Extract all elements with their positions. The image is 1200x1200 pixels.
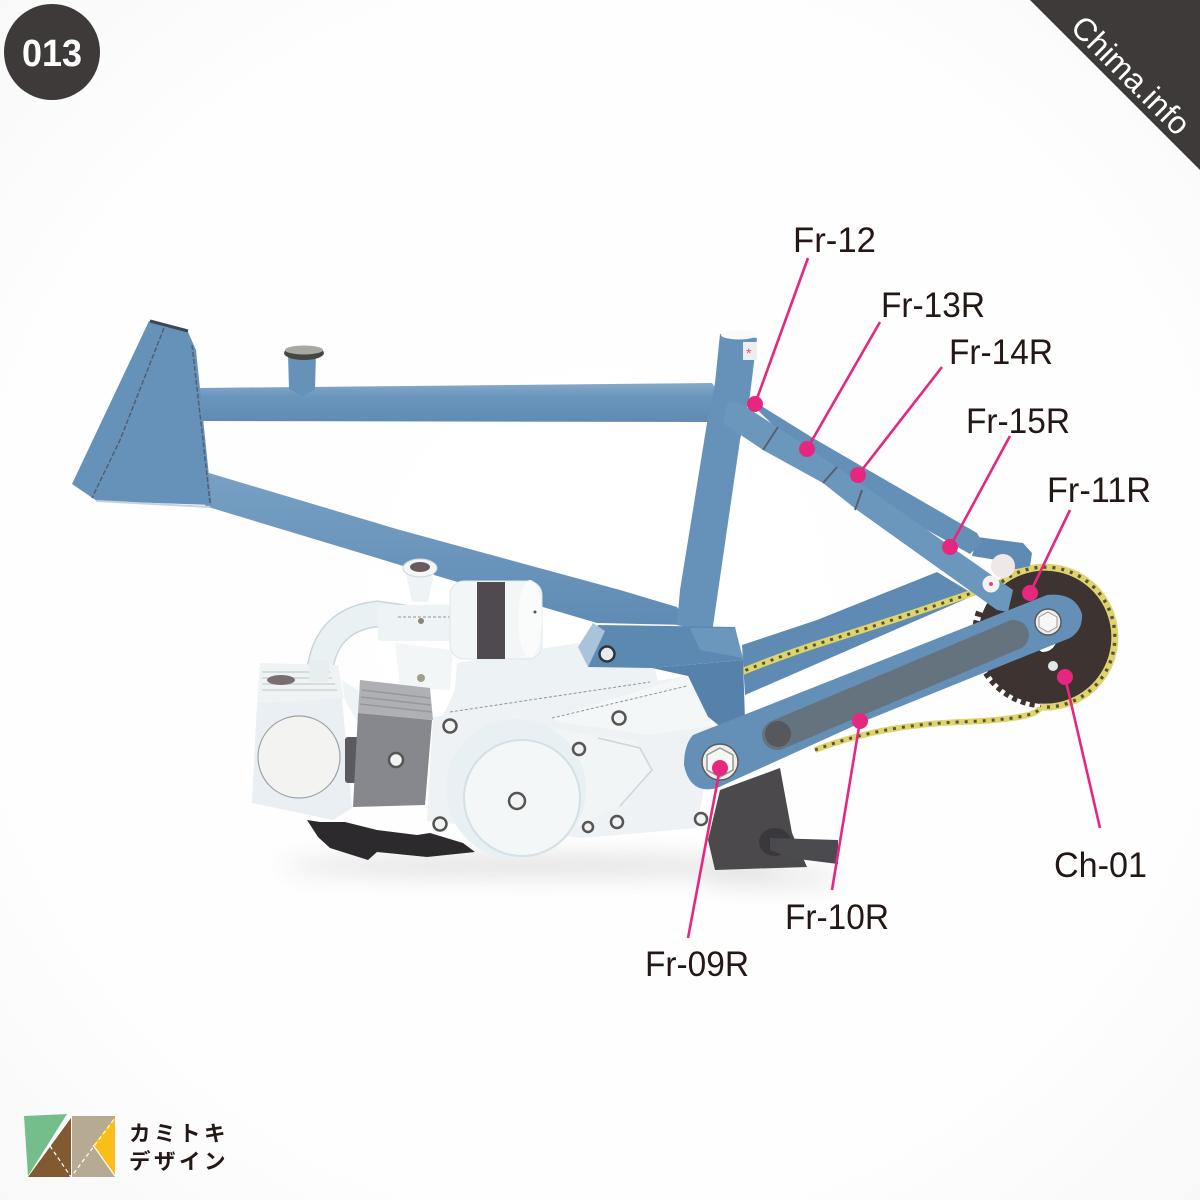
clutch cover <box>446 719 586 859</box>
case bolts <box>434 712 707 832</box>
callout: Fr-10R <box>785 713 889 937</box>
cylinder finned head <box>257 660 344 703</box>
crank bracket <box>708 768 838 870</box>
fuel cap stem <box>284 346 324 397</box>
callout: Fr-10R: Fr-10R <box>785 898 889 937</box>
callout: Fr-15R <box>942 402 1070 555</box>
callout: Fr-09R <box>645 760 749 984</box>
chain stay <box>742 572 975 695</box>
callout: Fr-13R: Fr-13R <box>881 286 985 325</box>
upper chain run <box>696 592 975 692</box>
seat tube <box>677 330 757 633</box>
seat stay front tube <box>723 402 1013 612</box>
ground shadow <box>280 856 840 884</box>
grey exhaust block <box>345 680 433 807</box>
corner ribbon: Chima.info <box>1030 0 1200 170</box>
bicycle frame and motor model <box>72 321 1115 870</box>
callout: Fr-12: Fr-12 <box>793 221 876 260</box>
callout: Fr-11R <box>1022 471 1151 601</box>
callout: Ch-01 <box>1054 669 1147 885</box>
throttle body <box>378 559 456 690</box>
callout: Fr-13R <box>799 286 985 457</box>
badge: 013 <box>4 4 100 100</box>
air filter cylinder <box>450 580 542 659</box>
logo: Kamitoki Design: デザイン <box>129 1145 229 1176</box>
intake pipe inner <box>319 614 405 677</box>
logo text: カミトキ <box>129 1117 229 1148</box>
callout: Fr-09R: Fr-09R <box>645 945 749 984</box>
down tube <box>205 473 690 625</box>
swing arm <box>684 595 1082 789</box>
logo mark <box>24 1114 115 1177</box>
callout: Fr-14R <box>850 333 1053 483</box>
lower chain run <box>815 707 1040 750</box>
top tube <box>197 383 725 422</box>
engine main case <box>427 676 714 838</box>
head gusset <box>72 321 212 507</box>
rear stub <box>972 537 1032 578</box>
callout: Fr-12 <box>747 221 876 412</box>
bottom bracket box <box>578 623 745 732</box>
engine upper case <box>440 643 660 722</box>
intake pipe <box>319 614 405 677</box>
logo: Kamitoki Design <box>24 1114 229 1177</box>
seat tube: * <box>746 345 752 361</box>
corner ribbon: Chima.info: Chima.info <box>1064 8 1198 142</box>
badge: 013: 013 <box>22 33 82 75</box>
callout: Fr-11R: Fr-11R <box>1047 471 1151 510</box>
callout: Fr-14R: Fr-14R <box>949 333 1053 372</box>
seat stay rear tube <box>745 398 982 554</box>
cylinder block <box>252 680 362 820</box>
callout: Ch-01: Ch-01 <box>1054 846 1147 885</box>
sprocket and chain <box>976 567 1115 707</box>
black hose <box>307 820 475 860</box>
callout: Fr-15R: Fr-15R <box>966 402 1070 441</box>
